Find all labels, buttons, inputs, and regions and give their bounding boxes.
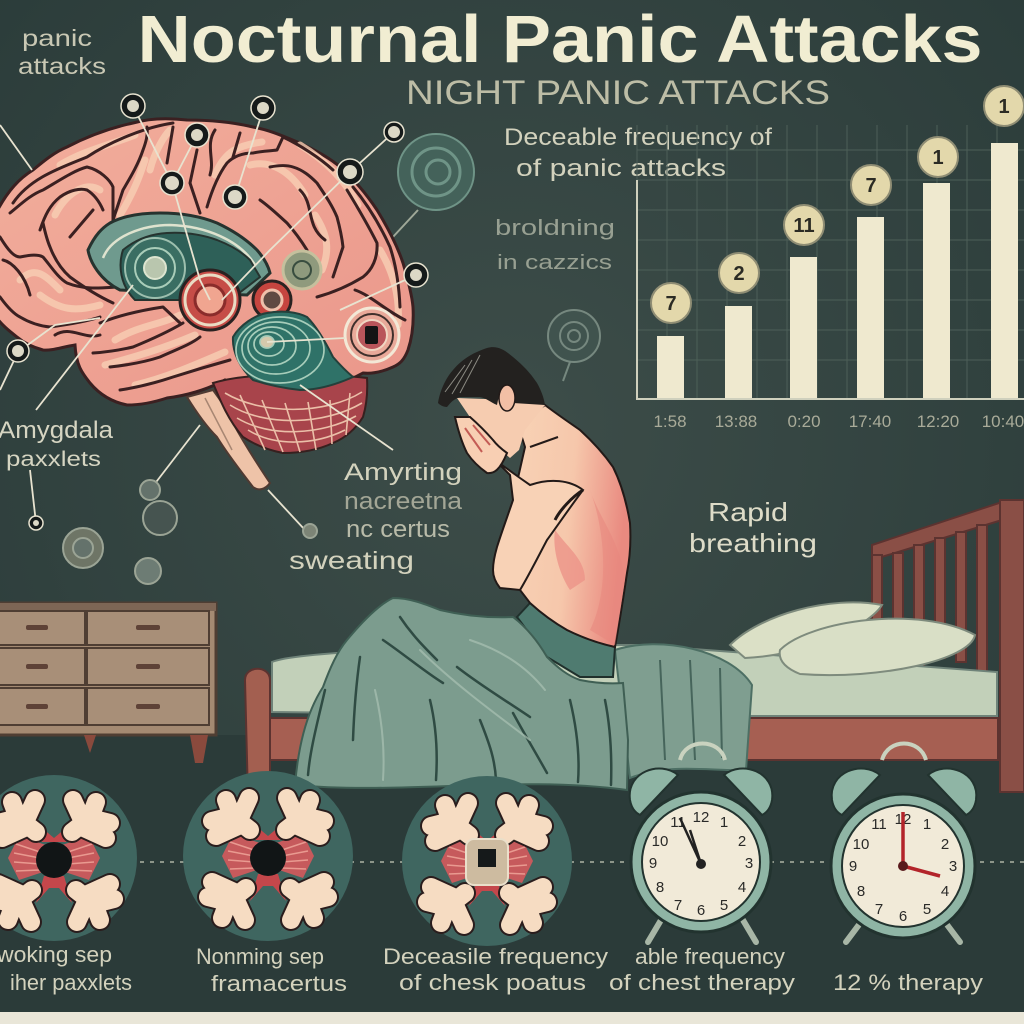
pillows	[730, 602, 882, 658]
alarm clock 1: 1	[720, 814, 728, 831]
alarm clock 2: 7	[875, 901, 883, 918]
brain slice 1	[0, 775, 137, 941]
alarm clock 1: 2	[738, 833, 746, 850]
axis labels: 1:58	[653, 412, 687, 431]
bar chart: 11	[793, 215, 815, 237]
alarm clock 1: 4	[738, 879, 746, 896]
alarm clock 2: 12	[895, 811, 911, 828]
bottom captions: 12 % therapy	[833, 970, 983, 995]
back	[513, 405, 630, 647]
bottom captions: of chesk poatus	[399, 970, 586, 995]
axis labels: 17:40	[849, 412, 891, 431]
alarm clock 2: 8	[857, 883, 865, 900]
bar chart: 2	[733, 263, 745, 285]
shorts	[517, 603, 615, 677]
label: symptoms: Amyrting	[344, 459, 462, 486]
ear	[499, 385, 515, 411]
chart heading: Deceable frequency of	[504, 124, 772, 151]
hippocampus	[233, 312, 353, 390]
faint nodes	[63, 480, 317, 584]
bar chart: 7	[865, 175, 877, 197]
alarm clock 2: 10	[853, 836, 869, 853]
alarm clock 2: 9	[849, 858, 857, 875]
icon: faint small circle	[548, 310, 600, 381]
bars	[657, 143, 1018, 398]
alarm clock 1: 10	[652, 833, 668, 850]
label: symptoms: sweating	[289, 547, 414, 575]
callout lines	[0, 106, 416, 530]
brain slice 3	[402, 776, 572, 946]
top-left clipped label: attacks	[18, 53, 106, 79]
label: rapid breathing: breathing	[689, 528, 817, 558]
corpus callosum band	[88, 213, 270, 295]
alarm clock 1: 7	[674, 897, 682, 914]
brain illustration	[0, 94, 428, 584]
bar chart: 7	[665, 293, 677, 315]
alarm clock 2: 3	[949, 858, 957, 875]
side label	[495, 215, 615, 274]
label: symptoms	[289, 459, 463, 575]
label: symptoms: nacreetna	[344, 488, 463, 515]
axis labels: 12:20	[917, 412, 959, 431]
blanket	[295, 598, 628, 790]
mattress	[272, 645, 997, 716]
side label: in cazzics	[497, 252, 612, 274]
alarm clock 2: 4	[941, 883, 949, 900]
bar chart: 1	[998, 96, 1010, 118]
folds	[0, 123, 405, 390]
label: symptoms: nc certus	[346, 516, 450, 543]
bottom captions: Deceasile frequency	[383, 944, 608, 969]
back shading	[554, 530, 585, 590]
icon: faint target circle	[392, 134, 474, 238]
person	[438, 347, 630, 647]
right drape	[615, 644, 752, 778]
bed frame	[262, 718, 998, 760]
inner teal region	[121, 233, 260, 300]
top-left clipped label	[18, 25, 106, 79]
bottom captions: of chest therapy	[609, 970, 795, 995]
dashed divider	[0, 861, 1024, 863]
label: rapid breathing: Rapid	[708, 497, 788, 527]
bar chart	[637, 86, 1024, 431]
limbic spirals	[125, 238, 321, 330]
title: Nocturnal Panic Attacks	[138, 2, 982, 77]
alarm clock 1: 12	[693, 809, 709, 826]
alarm clock 1: 3	[745, 855, 753, 872]
alarm clock 1: 8	[656, 879, 664, 896]
alarm clock 2: 11	[871, 816, 887, 833]
label: amygdala	[0, 417, 114, 471]
right ring	[345, 308, 399, 362]
alarm clock 2: 2	[941, 836, 949, 853]
arm	[493, 460, 583, 590]
hair	[438, 347, 545, 407]
axis labels	[653, 412, 1024, 431]
bottom captions: able frequency	[635, 944, 785, 969]
alarm clock 2	[831, 744, 976, 942]
brain slice 2	[183, 771, 353, 941]
bottom captions: iher paxxlets	[10, 970, 132, 995]
alarm clock 2: 6	[899, 908, 907, 925]
alarm clock 1: 5	[720, 897, 728, 914]
alarm clock 1: 6	[697, 902, 705, 919]
cerebrum	[0, 119, 413, 405]
axis labels: 13:88	[715, 412, 757, 431]
brainstem	[187, 390, 270, 489]
label: rapid breathing	[689, 497, 817, 558]
neck collar line	[530, 437, 558, 447]
alarm clock 2: 5	[923, 901, 931, 918]
bottom captions	[0, 942, 983, 996]
hand on face	[455, 417, 507, 473]
side label: broldning	[495, 215, 615, 240]
alarm clock 2: 1	[923, 816, 931, 833]
headboard	[872, 500, 1024, 792]
bottom captions: Nonming sep	[196, 944, 324, 969]
dresser	[0, 603, 216, 763]
bar chart: 1	[932, 147, 944, 169]
alarm clock 1: 11	[670, 814, 686, 831]
chart heading: of panic attacks	[516, 155, 726, 182]
bed	[245, 500, 1024, 798]
label: amygdala: paxxlets	[6, 448, 101, 471]
cerebellum	[213, 375, 367, 453]
chart heading	[504, 124, 772, 182]
subtitle: NIGHT PANIC ATTACKS	[406, 74, 830, 112]
top-left clipped label: panic	[22, 25, 92, 51]
bottom captions: woking sep	[0, 942, 112, 967]
alarm clock 1: 9	[649, 855, 657, 872]
label: amygdala: Amygdala	[0, 417, 114, 444]
gyri highlights	[20, 130, 398, 385]
head	[457, 398, 545, 458]
bottom captions: framacertus	[211, 971, 347, 996]
callout markers	[7, 94, 428, 530]
axis labels: 0:20	[787, 412, 821, 431]
axis labels: 10:40	[982, 412, 1024, 431]
bar badges	[651, 86, 1024, 323]
alarm clock 1	[630, 744, 772, 942]
